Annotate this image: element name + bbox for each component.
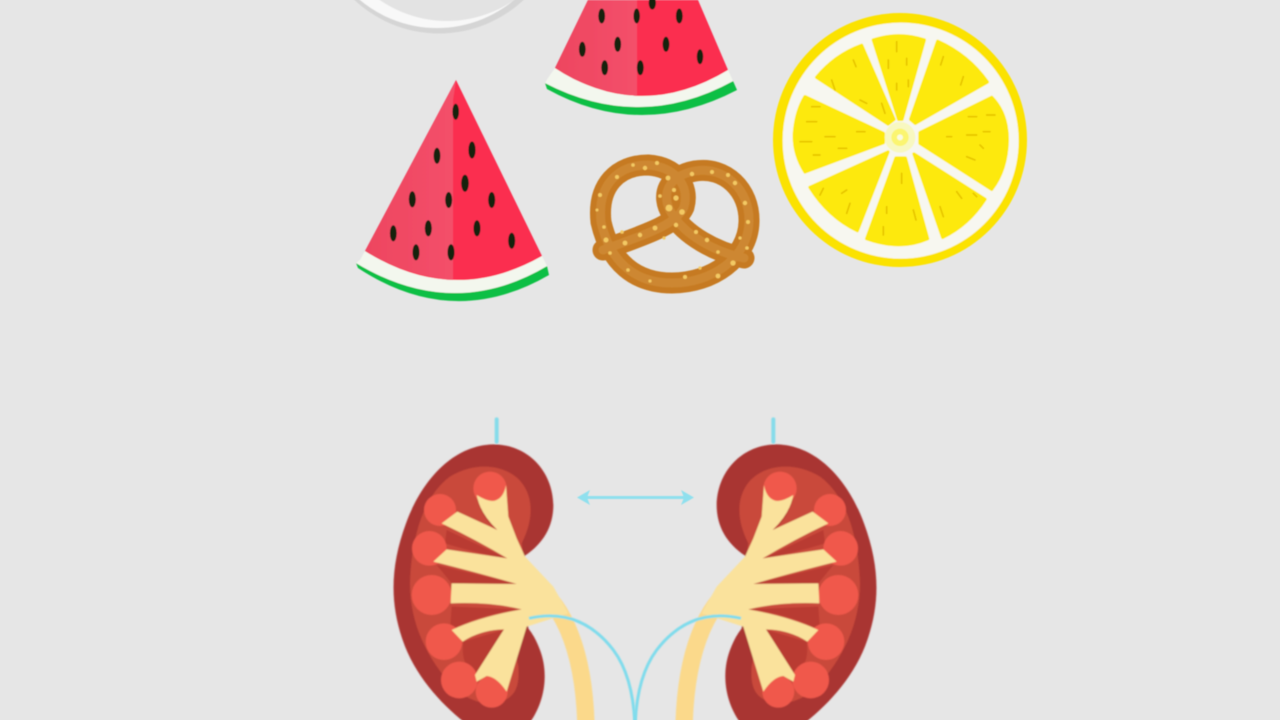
ureter: [530, 583, 586, 720]
lemon segments: [794, 36, 1007, 245]
inner medulla: [410, 467, 531, 704]
icon: lower watermelon slice: [356, 80, 549, 301]
icon: upper watermelon slice: [545, 0, 737, 115]
calyces: [433, 485, 568, 692]
kidney body: [394, 444, 553, 720]
seeds: [390, 104, 515, 260]
icon: left kidney: [394, 419, 635, 720]
inner medulla: [739, 467, 860, 704]
blue vessel stub: [491, 419, 503, 442]
blue vessel: [529, 616, 635, 720]
icon: glass rim: [316, 0, 565, 34]
calyces: [702, 485, 837, 692]
kidney body: [717, 444, 876, 720]
dark pyramids: [437, 477, 522, 673]
icon: pretzel: [596, 161, 750, 283]
seeds: [579, 0, 703, 75]
dark pyramids: [748, 477, 833, 673]
blue vessel: [635, 616, 741, 720]
icon: right kidney: [635, 419, 876, 720]
icon: lemon slice: [773, 13, 1027, 267]
blue vessel stub: [767, 419, 779, 442]
papillae: [412, 472, 508, 708]
pretzel salt: [596, 161, 750, 283]
ureter: [684, 583, 740, 720]
papillae: [762, 472, 858, 708]
lemon pulp flecks: [800, 42, 995, 235]
arrow: double-headed between kidneys: [577, 490, 694, 505]
lemon centre: [885, 122, 915, 153]
